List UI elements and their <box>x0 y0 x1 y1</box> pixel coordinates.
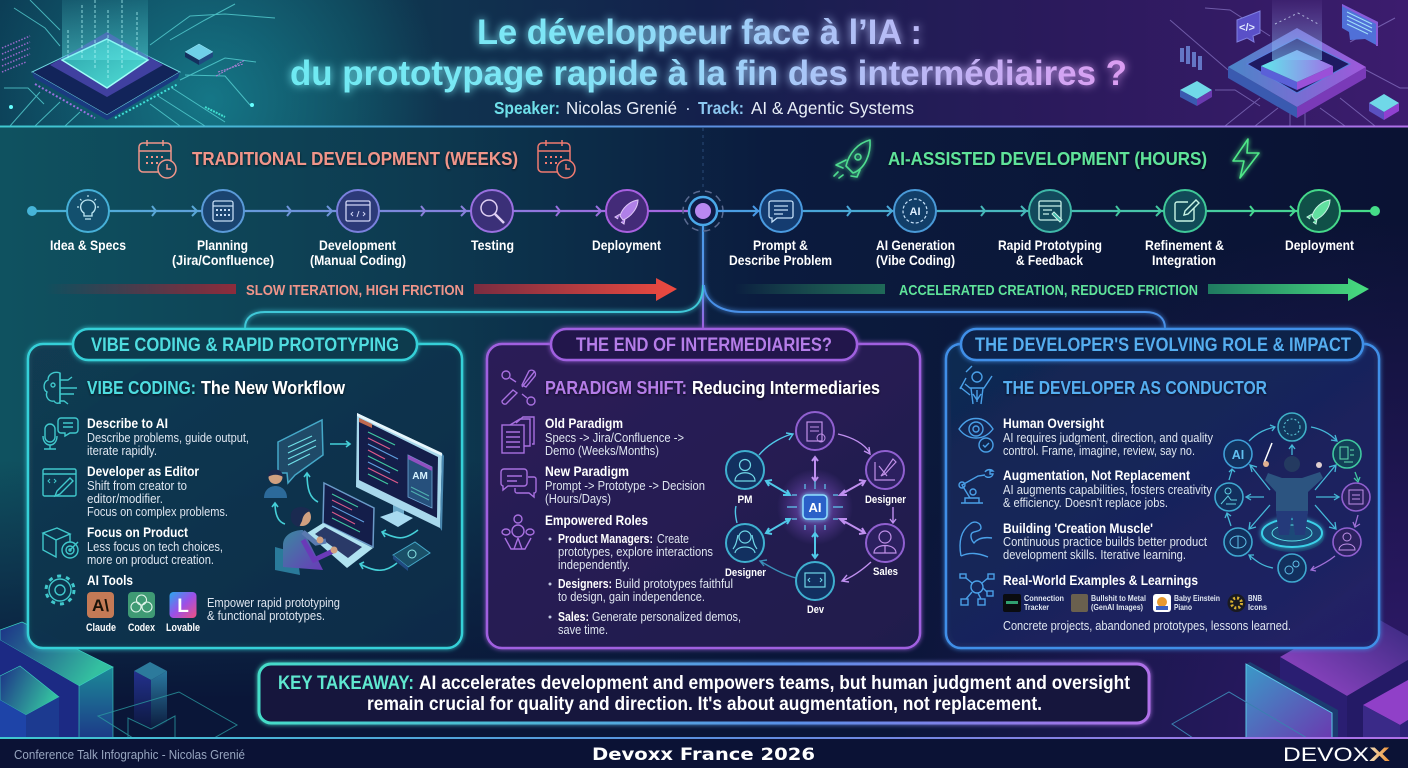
icon: robotic arm <box>959 470 993 503</box>
text: augmentation: AI augments capabilities, fosters creativity <box>1003 483 1213 497</box>
node: deployment <box>606 190 648 232</box>
diagram: AI hub network <box>725 412 907 616</box>
tool: Lovable: Lovable <box>166 622 200 634</box>
text: empowered roles: save time. <box>558 623 608 637</box>
text: tools description: Empower rapid prototyping <box>207 596 340 610</box>
footer event name: Devoxx France 2026 <box>592 745 815 765</box>
node: rapid prototyping <box>1029 190 1071 232</box>
node: testing <box>471 190 513 232</box>
text: tools description <box>207 596 340 623</box>
tool: Lovable: L <box>177 596 189 617</box>
text: empowered roles: Product Managers: <box>558 532 653 546</box>
example: bullshit to metal <box>1071 593 1146 612</box>
workflow arrows <box>272 441 418 570</box>
labels: traditional steps: Testing <box>471 237 514 253</box>
icon: documents <box>502 417 534 453</box>
text: developer as editor <box>87 463 228 519</box>
text: creation muscle: development skills. Iterative learning. <box>1003 548 1186 562</box>
heading: developer as conductor: THE DEVELOPER AS CONDUCTOR <box>1003 378 1267 398</box>
icon: calendar clock right <box>538 140 575 178</box>
labels: AI-assisted steps: (Vibe Coding) <box>876 252 955 268</box>
text: empowered roles: Empowered Roles <box>545 512 648 528</box>
labels: traditional steps: Deployment <box>592 237 661 253</box>
node: PM <box>726 451 764 506</box>
text: human oversight <box>1003 415 1214 458</box>
title: du prototypage rapide à la fin des intermédiaires ? <box>290 54 1127 93</box>
tool: Lovable <box>166 592 200 634</box>
illustration: developer at laptop with monitor <box>264 413 444 575</box>
speech tile: code: </> <box>1239 22 1255 34</box>
heading text: traditional: TRADITIONAL DEVELOPMENT (WEEKS) <box>192 149 518 169</box>
text: developer as editor: Developer as Editor <box>87 463 199 479</box>
node: designer left: Designer <box>725 567 767 579</box>
footer logo <box>1283 744 1390 766</box>
icon: box and target <box>43 528 78 558</box>
example: BNB icons: BNB <box>1248 593 1262 603</box>
panel title pill <box>551 329 857 360</box>
node: brain <box>1224 528 1252 556</box>
icon: microphone and chat <box>43 418 78 449</box>
text: augmentation: & efficiency. Doesn't replace jobs. <box>1003 496 1168 510</box>
labels: AI-assisted steps: AI Generation <box>876 237 955 253</box>
footer credit: Conference Talk Infographic - Nicolas Grenié <box>14 748 245 762</box>
node: purple document <box>1342 483 1370 511</box>
text: empowered roles: prototypes, explore interactions <box>558 545 713 559</box>
example: bullshit to metal: Bullshit to Metal <box>1091 593 1146 603</box>
node: dev: Dev <box>807 604 825 616</box>
icon: lightning bolt <box>1233 139 1259 178</box>
labels: AI-assisted steps <box>729 237 1354 268</box>
example: baby einstein piano: Baby Einstein <box>1174 593 1220 603</box>
text: describe to AI <box>87 415 249 458</box>
key takeaway box <box>259 664 1149 723</box>
text: describe to AI: iterate rapidly. <box>87 444 157 458</box>
node: document <box>796 412 834 450</box>
header band <box>0 0 1408 126</box>
text: real-world examples: Real-World Examples & Learnings <box>1003 572 1198 588</box>
labels: traditional steps: Idea & Specs <box>50 237 126 253</box>
subtitle: speaker and track: · <box>685 98 691 118</box>
subtitle: speaker and track: Speaker: <box>494 98 560 118</box>
node: idea and specs <box>67 190 109 232</box>
ring arrows <box>735 433 896 582</box>
small user <box>264 470 287 498</box>
key takeaway box: KEY TAKEAWAY: <box>278 673 414 694</box>
text: empowered roles: Sales: <box>558 610 589 624</box>
example: connection tracker <box>1003 593 1064 612</box>
text: developer as editor: editor/modifier. <box>87 492 163 506</box>
text: real-world examples <box>1003 572 1291 633</box>
labels: AI-assisted steps: Describe Problem <box>729 252 832 268</box>
example: BNB icons: Icons <box>1248 602 1267 612</box>
text: real-world examples: Concrete projects, abandoned prototypes, lessons learned. <box>1003 619 1291 633</box>
device <box>393 542 430 571</box>
icon: flexed arm <box>960 522 992 557</box>
icon: brain circuit <box>44 372 77 404</box>
node: brain network <box>1278 413 1306 441</box>
labels: AI-assisted steps: Rapid Prototyping <box>998 237 1102 253</box>
text: augmentation <box>1003 467 1213 510</box>
connector lines to panels <box>245 225 1165 328</box>
node: development <box>337 190 379 232</box>
subtitle: speaker and track: AI & Agentic Systems <box>751 98 914 118</box>
example: connection tracker: Tracker <box>1024 602 1050 612</box>
labels: AI-assisted steps: Integration <box>1152 252 1216 268</box>
text: tools description: & functional prototypes. <box>207 609 325 623</box>
node: AI generation <box>894 190 936 232</box>
example: BNB icons <box>1228 593 1267 612</box>
text: new paradigm <box>545 463 705 506</box>
panel: vibe coding and rapid prototyping <box>28 329 462 648</box>
speech tile: code <box>1237 11 1260 42</box>
text: old paradigm: Demo (Weeks/Months) <box>545 444 659 458</box>
text: creation muscle: Continuous practice builds better product <box>1003 535 1207 549</box>
text: empowered roles: Generate personalized demos, <box>592 610 741 624</box>
monitor <box>356 413 444 531</box>
icon: code window with pencil <box>43 469 76 496</box>
text: focus on product <box>87 524 223 567</box>
tool: Claude <box>86 592 116 634</box>
labels: traditional steps: (Jira/Confluence) <box>172 252 274 268</box>
example: baby einstein piano <box>1153 593 1220 612</box>
orbit arrows <box>1225 425 1360 571</box>
labels: traditional steps <box>50 237 661 268</box>
text: new paradigm: Prompt -> Prototype -> Decision <box>545 479 705 493</box>
arrow: slow iteration, high friction <box>45 278 677 301</box>
labels: AI-assisted steps: Prompt & <box>753 237 808 253</box>
node: sales: Sales <box>873 566 898 578</box>
example: baby einstein piano: Piano <box>1174 602 1192 612</box>
subtitle: speaker and track <box>494 98 914 118</box>
panel title pill: THE DEVELOPER'S EVOLVING ROLE & IMPACT <box>975 335 1351 356</box>
hub to node arrows <box>766 457 865 558</box>
icon: broken chain <box>502 370 535 405</box>
icon: empowered people <box>502 515 534 549</box>
node: AI: AI <box>1232 448 1244 462</box>
illustration: left AI chip <box>2 0 275 126</box>
center hub node <box>683 128 723 231</box>
text: empowered roles: Build prototypes faithful <box>615 577 733 591</box>
conductor figure <box>1263 443 1323 535</box>
text: focus on product: more on product creation. <box>87 553 214 567</box>
timeline: traditional <box>27 190 690 268</box>
laptop <box>307 483 374 568</box>
tool: Codex <box>128 592 156 634</box>
timeline: AI-assisted <box>717 190 1380 268</box>
footer <box>0 737 1408 768</box>
node: refinement <box>1164 190 1206 232</box>
text: human oversight: AI requires judgment, direction, and quality <box>1003 431 1214 445</box>
text: empowered roles: Designers: <box>558 577 612 591</box>
heading text: AI-assisted: AI-ASSISTED DEVELOPMENT (HOURS) <box>888 149 1207 169</box>
text: human oversight: Human Oversight <box>1003 415 1104 431</box>
node: designer right <box>865 451 907 506</box>
icon: conductor <box>960 366 992 404</box>
footer logo: X <box>1369 744 1390 766</box>
labels: AI-assisted steps: & Feedback <box>1016 252 1083 268</box>
monitor: AM <box>412 471 428 482</box>
example: connection tracker: Connection <box>1024 593 1064 603</box>
title <box>290 13 1127 93</box>
icon: gear brain <box>46 576 74 604</box>
text: human oversight: control. Frame, imagine, review, say no. <box>1003 444 1195 458</box>
text: describe to AI: Describe to AI <box>87 415 168 431</box>
heading: paradigm shift <box>545 378 880 398</box>
tool: Claude: A\ <box>92 596 109 615</box>
panel: the developer's evolving role and impact <box>946 329 1379 648</box>
node: AI <box>1224 440 1252 468</box>
text: creation muscle: Building 'Creation Muscle' <box>1003 520 1153 536</box>
node: green code <box>1333 440 1361 468</box>
node: dev <box>796 562 834 616</box>
speech tile: text <box>1342 4 1378 46</box>
subtitle: speaker and track: Track: <box>698 98 744 118</box>
platform <box>1260 519 1324 552</box>
icon: eye with check <box>959 418 993 452</box>
text: empowered roles: Create <box>657 532 689 546</box>
text: AI tools: AI Tools <box>87 572 133 588</box>
speech bubble <box>278 420 323 483</box>
icon: network of nodes <box>960 574 994 605</box>
panel title pill: VIBE CODING & RAPID PROTOTYPING <box>91 335 399 356</box>
node: AI generation: AI <box>910 206 920 218</box>
AI chip <box>787 481 843 533</box>
text: new paradigm: (Hours/Days) <box>545 492 611 506</box>
arrow: accelerated creation, reduced friction <box>735 278 1369 301</box>
node: planning <box>202 190 244 232</box>
text: new paradigm: New Paradigm <box>545 463 629 479</box>
text: developer as editor: Focus on complex problems. <box>87 505 228 519</box>
heading: paradigm shift: Reducing Intermediaries <box>692 378 880 398</box>
heading: vibe coding <box>87 378 346 398</box>
diagram: conductor with orbiting capabilities <box>1215 413 1370 582</box>
node: gears <box>1278 554 1306 582</box>
text: focus on product: Less focus on tech choices, <box>87 540 223 554</box>
text: empowered roles <box>545 512 741 637</box>
icon: rocket <box>834 140 870 178</box>
text: creation muscle <box>1003 520 1207 562</box>
subtitle: speaker and track: Nicolas Grenié <box>566 98 677 118</box>
node: purple team <box>1333 528 1361 556</box>
illustration: right AI chip <box>1170 0 1408 126</box>
text: empowered roles: to design, gain independence. <box>558 590 705 604</box>
decorative isometric blocks: bottom right <box>1172 610 1408 738</box>
text: empowered roles: independently. <box>558 558 630 572</box>
panel: the end of intermediaries <box>487 329 920 648</box>
key takeaway box: AI accelerates development and empowers teams, but human judgment and oversight <box>419 673 1131 694</box>
panel title pill <box>73 329 417 360</box>
labels: traditional steps: Development <box>319 237 396 253</box>
labels: AI-assisted steps: Refinement & <box>1145 237 1224 253</box>
AI chip: AI <box>808 500 822 515</box>
decorative isometric blocks: bottom left <box>0 622 237 738</box>
node: prompt <box>760 190 802 232</box>
tool: Claude: Claude <box>86 622 116 634</box>
text: old paradigm <box>545 415 684 458</box>
traditional development heading <box>139 140 575 178</box>
example: bullshit to metal: (GenAI Images) <box>1091 602 1143 612</box>
icon: calendar clock left <box>139 140 176 178</box>
heading: vibe coding: VIBE CODING: <box>87 378 196 398</box>
arrow: slow iteration, high friction: SLOW ITERATION, HIGH FRICTION <box>246 282 464 299</box>
panel title pill: THE END OF INTERMEDIARIES? <box>576 335 832 356</box>
text: old paradigm: Specs -> Jira/Confluence -> <box>545 431 684 445</box>
developer <box>275 507 338 575</box>
heading: paradigm shift: PARADIGM SHIFT: <box>545 378 687 398</box>
node: designer right: Designer <box>865 494 907 506</box>
node: sales <box>866 524 904 578</box>
AI-assisted development heading <box>834 139 1259 178</box>
text: augmentation: Augmentation, Not Replacement <box>1003 467 1190 483</box>
node: AI deployment <box>1298 190 1340 232</box>
arrow: accelerated creation, reduced friction: ACCELERATED CREATION, REDUCED FRICTION <box>899 282 1198 299</box>
node: PM: PM <box>738 494 752 506</box>
tool: Codex: Codex <box>128 622 156 634</box>
text: developer as editor: Shift from creator to <box>87 479 187 493</box>
labels: traditional steps: Planning <box>197 237 248 253</box>
node: team work <box>1215 483 1243 511</box>
key takeaway box: remain crucial for quality and direction. It's about augmentation, not replacement. <box>367 694 1042 715</box>
labels: AI-assisted steps: Deployment <box>1285 237 1354 253</box>
panel title pill <box>961 329 1363 360</box>
labels: traditional steps: (Manual Coding) <box>310 252 406 268</box>
heading: vibe coding: The New Workflow <box>201 378 346 398</box>
icon: chat bubbles <box>501 469 536 497</box>
text: describe to AI: Describe problems, guide output, <box>87 431 249 445</box>
text: old paradigm: Old Paradigm <box>545 415 623 431</box>
node: designer left <box>725 524 767 579</box>
title: Le développeur face à l’IA : <box>477 13 922 52</box>
text: focus on product: Focus on Product <box>87 524 188 540</box>
footer logo: DEVOX <box>1283 744 1369 766</box>
